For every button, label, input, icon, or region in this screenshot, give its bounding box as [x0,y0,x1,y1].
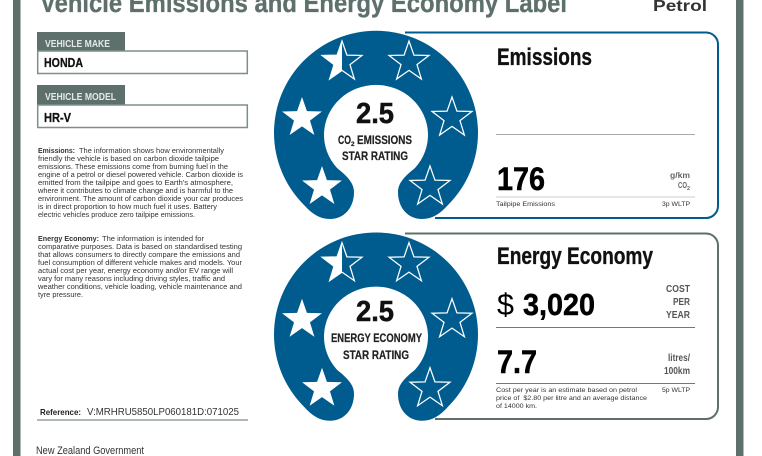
text block: energy economy explanation: that allows consumers to directly compare the emissions and [38,252,240,259]
emissions unit: CO [678,181,687,190]
text block: energy economy explanation: fuel consumption of different vehicle makes and models. Your [38,260,243,267]
text block: energy economy explanation: The information is intended for [102,236,205,243]
text block: energy economy explanation: vary for many reasons including driving styles, traffic and [38,276,225,283]
fuel economy unit: litres/ [668,353,690,364]
fuel economy value: 7.7 [497,344,537,380]
energy rating label: ENERGY ECONOMY [331,331,422,345]
text block: energy economy explanation [37,236,243,299]
empty star [432,299,472,337]
text block: energy economy explanation: Energy Economy: [38,236,99,243]
empty star [389,41,429,79]
reference number [37,407,248,420]
filled star [302,368,342,406]
CO2 rating value: 2.5 [356,98,394,130]
text block: emissions explanation: electric vehicles produce zero tailpipe emissions. [38,212,195,219]
cost per year value [497,287,595,322]
field: vehicle make: VEHICLE MAKE [45,39,110,50]
text block: emissions explanation [37,148,244,219]
empty star [389,243,429,281]
empty star [410,368,450,406]
text block: emissions explanation: Emissions: [38,148,75,155]
CO2 rating label: 2 [351,142,355,148]
cost per year value: $ [497,287,514,322]
energy rating label: STAR RATING [343,348,409,362]
text block: emissions explanation: where it contributes to climate change and is harmful to the [37,188,233,195]
CO2 rating label: EMISSIONS [357,133,412,147]
filled star [302,166,342,204]
text block: energy economy explanation: weather conditions, vehicle loading, vehicle maintenance and [37,284,242,291]
empty star [432,97,472,135]
reference number: Reference: [40,407,81,417]
text block: emissions explanation: The information shows how environmentally [79,148,225,155]
cost per year unit: YEAR [666,309,690,321]
tailpipe caption: Tailpipe Emissions [496,202,555,208]
cost estimate note: price of $2.80 per litre and an average distance [496,396,648,402]
cost estimate note [496,388,648,410]
text block: energy economy explanation: tyre pressure. [38,292,83,299]
emissions unit [670,171,690,192]
text block: emissions explanation: environment. The amount of carbon dioxide your car produces [38,196,244,203]
emissions heading: Emissions [497,44,592,71]
energy rating label [331,331,422,362]
energy economy star rating badge [274,232,478,421]
filled star [282,299,322,337]
cost estimate note: Cost per year is an estimate based on petrol [496,388,637,394]
field: vehicle model: HR-V [44,110,71,125]
emissions unit: 2 [687,186,690,192]
text block: energy economy explanation: comparative purposes. Data is based on standardised testing [38,244,242,251]
test cycle caption: 3p WLTP [662,202,690,208]
emissions unit: g/km [670,171,690,180]
text block: energy economy explanation: actual cost per year, energy economy and/or EV range will [38,268,233,275]
cost per year unit: PER [673,296,690,308]
cost estimate note: of 14000 km. [496,404,537,410]
text block: emissions explanation: emitted from the tailpipe and goes to Earth's atmosphere, [38,180,233,187]
cost per year value: 3,020 [523,287,595,322]
field: vehicle model: VEHICLE MODEL [45,92,116,103]
field: vehicle model [37,85,247,128]
filled star [282,97,322,135]
emissions value: 176 [497,161,545,197]
CO2 rating label: STAR RATING [342,149,408,163]
text block: emissions explanation: is in direct proportion to how much fuel it uses. Battery [38,204,218,211]
energy rating value: 2.5 [356,296,394,328]
cost per year unit [666,283,690,321]
text block: emissions explanation: emissions. These emissions come from burning fuel in the [38,164,228,171]
panel: energy economy [405,234,718,419]
text block: emissions explanation: engine of a petrol or diesel powered vehicle. Carbon dioxide is [38,172,244,179]
fuel economy unit [664,353,690,377]
text block: emissions explanation: friendly the vehicle is based on carbon dioxide tailpipe [38,156,219,163]
reference number: V:MRHRU5850LP060181D:071025 [87,407,239,418]
half star [322,243,362,281]
test cycle caption: 5p WLTP [662,388,690,394]
field: vehicle make [37,32,247,74]
CO2 rating label [338,133,412,163]
panel: emissions [405,32,718,218]
energy economy heading: Energy Economy [497,243,654,270]
half star [322,41,362,79]
CO2 rating label: CO [338,133,351,147]
empty star [410,166,450,204]
field: vehicle make: HONDA [44,55,83,70]
fuel economy unit: 100km [664,366,690,377]
cost per year unit: COST [666,283,690,295]
CO2 star rating badge [274,31,478,219]
